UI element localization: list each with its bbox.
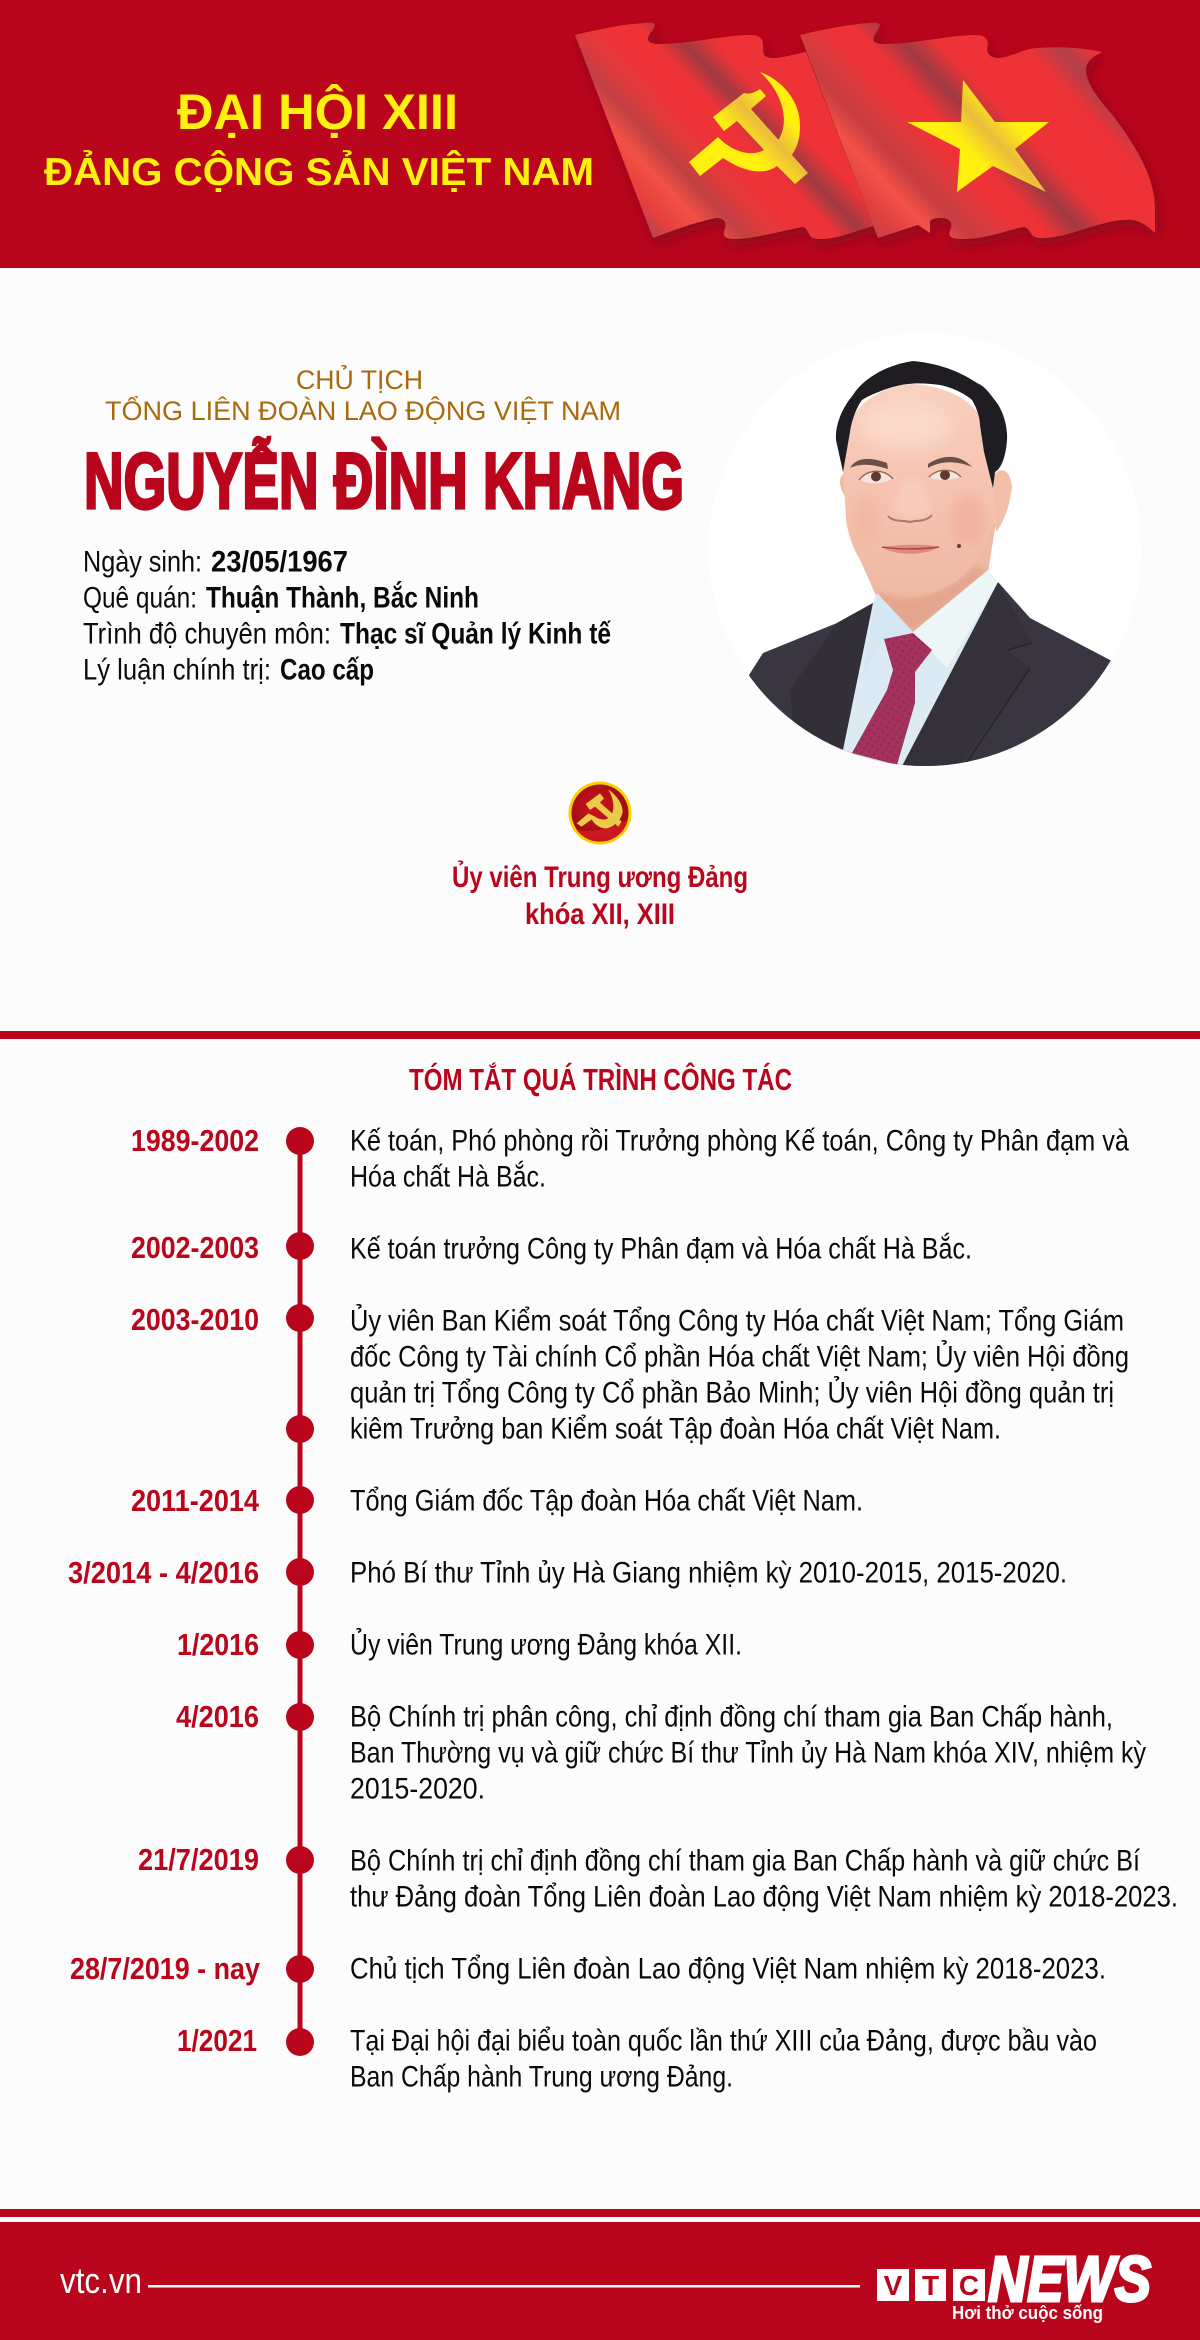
VTC News logo: T — [922, 2270, 939, 2301]
footer band — [0, 2222, 1200, 2340]
timeline entry 1/2021: Ban Chấp hành Trung ương Đảng. — [350, 2060, 733, 2094]
portrait photo — [748, 361, 1111, 766]
role heading: TỔNG LIÊN ĐOÀN LAO ĐỘNG VIỆT NAM — [105, 395, 621, 426]
timeline entry 28/7/2019 - nay: 28/7/2019 - nay — [70, 1951, 261, 1986]
home town: Thuận Thành, Bắc Ninh — [206, 580, 479, 614]
banner title: ĐẠI HỘI XIII — [177, 83, 458, 140]
timeline entry 1989-2002: 1989-2002 — [131, 1123, 259, 1158]
party flag — [575, 23, 878, 239]
personal details — [83, 546, 611, 686]
eyebrows — [850, 459, 888, 469]
VTC News logo: NEWS — [988, 2243, 1151, 2315]
icon: hammer and sickle — [689, 72, 808, 184]
political theory: Lý luận chính trị: — [83, 654, 271, 686]
timeline entry 21/7/2019: 21/7/2019 — [138, 1842, 259, 1877]
icon: party badge — [568, 782, 632, 844]
home town — [83, 580, 479, 614]
tie — [852, 633, 932, 765]
birth date: 23/05/1967 — [211, 546, 348, 578]
home town: Quê quán: — [83, 582, 197, 614]
face — [843, 384, 995, 596]
mole — [957, 544, 961, 548]
person name: NGUYỄN ĐÌNH KHANG — [84, 436, 684, 525]
header banner — [0, 0, 1200, 268]
timeline entry 3/2014 - 4/2016: 3/2014 - 4/2016 — [68, 1555, 259, 1590]
timeline entry 1/2021: 1/2021 — [177, 2023, 257, 2058]
national flag — [800, 23, 1155, 239]
timeline axis — [298, 1141, 302, 2042]
membership note — [452, 860, 748, 931]
banner title: ĐẢNG CỘNG SẢN VIỆT NAM — [44, 149, 594, 194]
timeline entry 1/2016 — [177, 1627, 742, 1662]
timeline entry 2003-2010: kiêm Trưởng ban Kiểm soát Tập đoàn Hóa chất Việt Nam. — [350, 1412, 1001, 1446]
banner title — [44, 83, 594, 194]
left ear — [840, 474, 845, 496]
timeline entry 1/2016: 1/2016 — [177, 1627, 259, 1662]
VTC News logo — [877, 2243, 1151, 2323]
qualification — [83, 618, 611, 650]
VTC News logo: C — [959, 2270, 979, 2301]
icon: star — [907, 80, 1049, 192]
timeline entry 2011-2014: Tổng Giám đốc Tập đoàn Hóa chất Việt Nam. — [350, 1484, 863, 1518]
timeline entry 2002-2003: 2002-2003 — [131, 1230, 259, 1265]
role heading — [105, 363, 621, 426]
timeline entry 4/2016 — [176, 1699, 1146, 1806]
timeline entry 2011-2014: 2011-2014 — [131, 1483, 260, 1518]
hair — [836, 361, 1007, 488]
birth date — [83, 546, 348, 578]
timeline entry 4/2016: 4/2016 — [176, 1699, 259, 1734]
timeline entry 1989-2002 — [131, 1123, 1129, 1194]
timeline entry 21/7/2019 — [138, 1842, 1178, 1914]
VTC News logo: V — [884, 2270, 903, 2301]
timeline entry 2003-2010: 2003-2010 — [131, 1302, 259, 1337]
birth date: Ngày sinh: — [83, 546, 202, 578]
flags illustration — [575, 23, 1158, 245]
timeline entry 1989-2002: Hóa chất Hà Bắc. — [350, 1160, 546, 1194]
timeline entry 2002-2003: Kế toán trưởng Công ty Phân đạm và Hóa chất Hà Bắc. — [350, 1232, 972, 1266]
VTC News logo: Hơi thở cuộc sống — [952, 2303, 1103, 2323]
eyes — [860, 472, 892, 483]
timeline heading: TÓM TẮT QUÁ TRÌNH CÔNG TÁC — [409, 1061, 792, 1097]
right ear — [992, 470, 1012, 532]
timeline entry 3/2014 - 4/2016 — [68, 1555, 1067, 1590]
timeline entry 1/2021 — [177, 2023, 1097, 2094]
timeline entry 2002-2003 — [131, 1230, 972, 1266]
qualification: Trình độ chuyên môn: — [83, 618, 331, 650]
neck — [858, 522, 996, 632]
nose — [888, 515, 932, 522]
banner background — [0, 0, 1200, 268]
role heading: CHỦ TỊCH — [296, 363, 423, 395]
membership note: Ủy viên Trung ương Đảng — [452, 860, 748, 894]
timeline entry 28/7/2019 - nay — [70, 1951, 1106, 1986]
political theory: Cao cấp — [280, 654, 374, 686]
mouth — [882, 545, 939, 554]
timeline entry 3/2014 - 4/2016: Phó Bí thư Tỉnh ủy Hà Giang nhiệm kỳ 2010-2015, 2015-2020. — [350, 1556, 1067, 1590]
shirt — [843, 572, 998, 770]
timeline entry 1/2016: Ủy viên Trung ương Đảng khóa XII. — [350, 1628, 742, 1662]
timeline entry 2011-2014 — [131, 1483, 863, 1518]
timeline entry 2003-2010 — [131, 1302, 1129, 1446]
timeline entry 4/2016: 2015-2020. — [350, 1772, 485, 1806]
site address: vtc.vn — [60, 2260, 142, 2301]
qualification: Thạc sĩ Quản lý Kinh tế — [340, 618, 611, 650]
membership note: khóa XII, XIII — [525, 898, 675, 931]
jacket — [748, 582, 1111, 766]
